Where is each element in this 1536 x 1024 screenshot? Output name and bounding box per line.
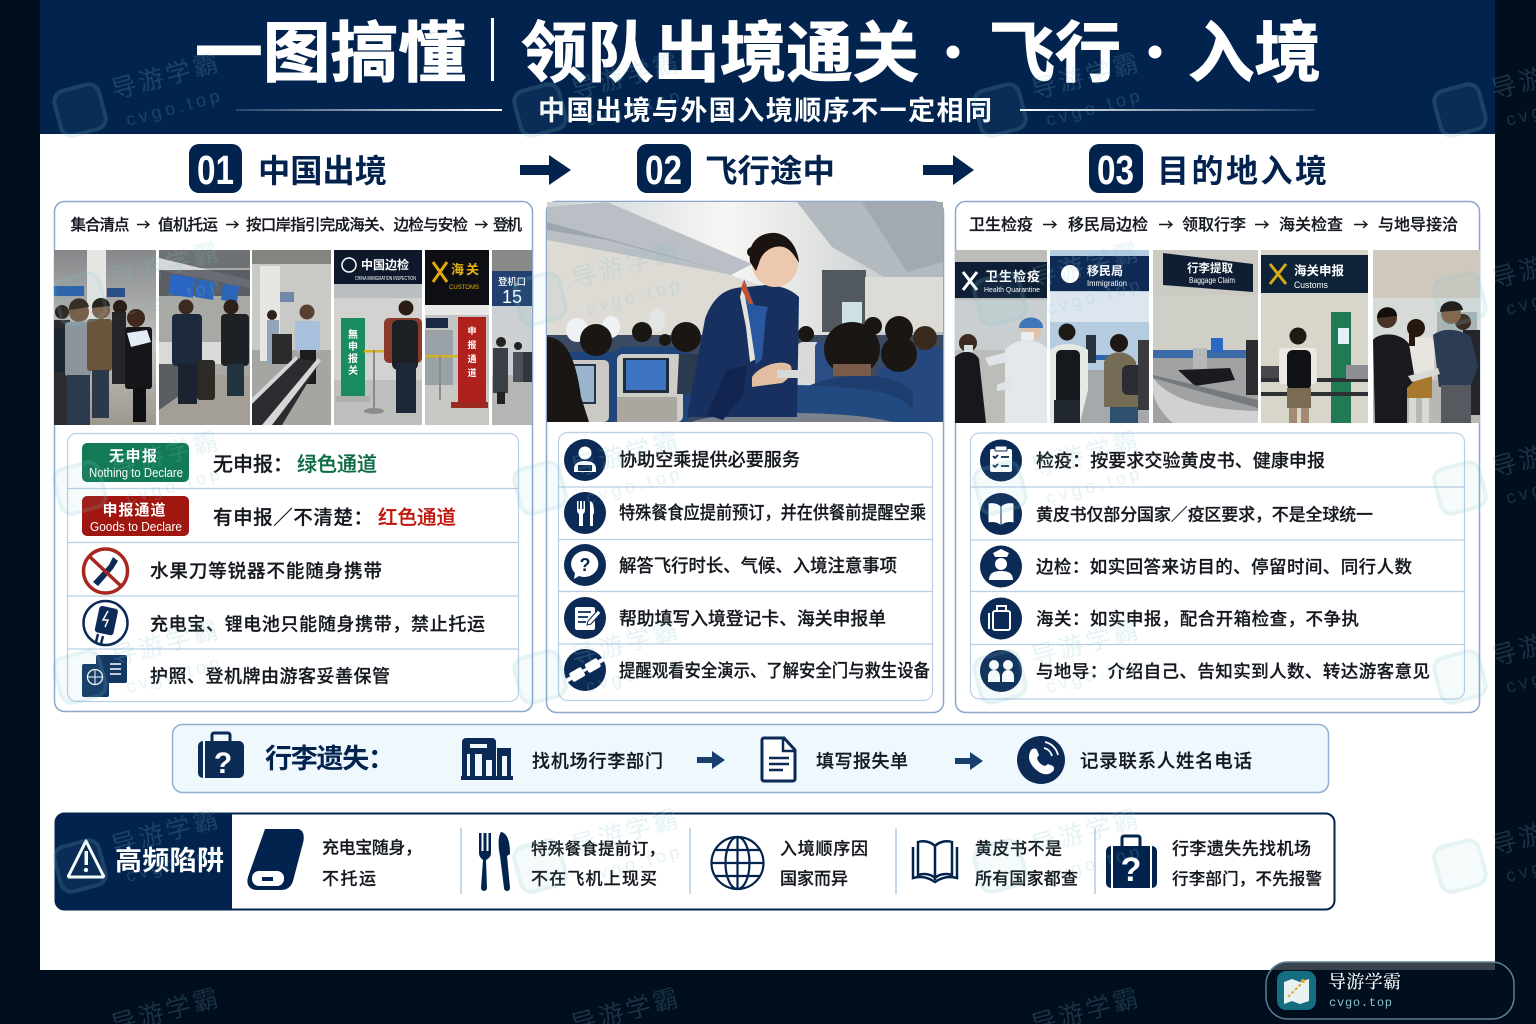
panel: China departure xyxy=(54,202,532,712)
text: 解答飞行时长、气候、入境注意事项 xyxy=(619,556,897,576)
flow text: 值机托运 xyxy=(158,216,218,234)
arrow xyxy=(923,155,974,185)
photo: immigration: Immigration xyxy=(1087,278,1127,288)
text xyxy=(531,838,665,888)
icon: suitcase xyxy=(980,598,1022,640)
icon: border officer xyxy=(980,546,1022,588)
watermark: 导游学霸 xyxy=(109,238,224,294)
photo: border control: 关 xyxy=(348,364,358,377)
arrow xyxy=(697,751,725,769)
watermark: 导游学霸 xyxy=(109,49,224,105)
watermark: cvgo.top xyxy=(124,841,225,886)
brand url: cvgo.top xyxy=(1329,996,1392,1010)
flow text: 卫生检疫 xyxy=(969,216,1033,234)
flow text: 领取行李 xyxy=(1182,216,1246,234)
watermark: 导游学霸 xyxy=(569,805,684,861)
icon: airport office xyxy=(461,738,513,780)
watermark: cvgo.top xyxy=(124,652,225,697)
photo: boarding gate: 15 xyxy=(502,287,522,307)
watermark: 导游学霸 xyxy=(1029,427,1144,483)
text: 海关：如实申报，配合开箱检查，不争执 xyxy=(1036,606,1359,631)
watermark: cvgo.top xyxy=(584,274,685,319)
icon: attendant xyxy=(564,439,606,481)
icon: lost suitcase xyxy=(1106,836,1157,889)
photo: baggage belt xyxy=(252,250,331,425)
photo: gathering xyxy=(54,250,156,425)
photo: immigration: 移民局 xyxy=(1087,263,1123,278)
text: 护照、登机牌由游客妥善保管 xyxy=(150,666,390,686)
flow text: 与地导接洽 xyxy=(1378,216,1458,234)
text: 记录联系人姓名电话 xyxy=(1080,750,1252,772)
photo: customs hall: 海关申报 xyxy=(1294,263,1344,278)
text: 边检：如实回答来访目的、停留时间、同行人数 xyxy=(1036,554,1412,579)
photo: border control: 無 xyxy=(348,328,358,341)
watermark: cvgo.top xyxy=(1044,85,1145,130)
red channel: 有申报／不清楚： xyxy=(213,501,373,530)
list: entry notes xyxy=(970,433,1465,699)
attendant xyxy=(687,233,807,420)
flow text xyxy=(70,215,522,234)
seats xyxy=(555,342,943,422)
heading: 03: 03 xyxy=(1097,147,1134,193)
green channel: 无申报： xyxy=(213,448,293,477)
photo: customs: CUSTOMS xyxy=(449,285,479,291)
text: 找机场行李部门 xyxy=(532,752,663,772)
text xyxy=(322,838,422,888)
text: 黄皮书不是 xyxy=(975,840,1062,858)
text: 不托运 xyxy=(322,870,376,888)
photo: customs: 海关 xyxy=(451,262,479,277)
red channel xyxy=(82,496,456,536)
icon: fork and knife xyxy=(479,832,510,891)
watermark: cvgo.top xyxy=(124,274,225,319)
text: 与地导：介绍自己、告知实到人数、转达游客意见 xyxy=(1036,658,1430,684)
green channel: Nothing to Declare xyxy=(89,466,183,480)
flow text: 登机 xyxy=(493,216,522,234)
text: 填写报失单 xyxy=(816,752,908,772)
text: 检疫：按要求交验黄皮书、健康申报 xyxy=(1036,447,1325,473)
photo: customs hall xyxy=(1261,250,1368,423)
green channel xyxy=(82,443,377,482)
panel: in flight xyxy=(546,202,944,712)
content sheet xyxy=(40,134,1495,970)
green channel: 绿色通道 xyxy=(297,453,377,476)
icon: globe xyxy=(712,837,764,889)
heading: 01: 01 xyxy=(197,147,234,193)
title: 飞行 xyxy=(989,16,1121,90)
icon: open book xyxy=(980,493,1022,535)
title xyxy=(195,16,1321,90)
watermark: 导游学霸 xyxy=(569,238,684,294)
watermark: cvgo.top xyxy=(1044,463,1145,508)
flow text: 移民局边检 xyxy=(1068,216,1148,234)
photo: border control: 报 xyxy=(348,352,358,365)
flow text xyxy=(969,216,1458,234)
icon: form xyxy=(564,597,606,639)
icon: document xyxy=(762,738,795,781)
watermark: cvgo.top xyxy=(584,841,685,886)
text xyxy=(780,840,868,888)
watermark: 导游学霸 xyxy=(569,427,684,483)
pitfalls label xyxy=(55,813,232,910)
brand name: 导游学霸 xyxy=(1328,968,1401,994)
photo: meeting guide xyxy=(1373,250,1480,423)
watermark: cvgo.top xyxy=(584,652,685,697)
red channel: 申报通道 xyxy=(102,501,166,519)
text xyxy=(975,840,1078,888)
watermark: cvgo.top xyxy=(1044,841,1145,886)
text: 充电宝、锂电池只能随身携带，禁止托运 xyxy=(150,614,485,634)
watermark: 导游学霸 xyxy=(1029,238,1144,294)
watermark: 导游学霸 xyxy=(569,49,684,105)
flow text: 按口岸指引完成海关、边检与安检 xyxy=(246,215,468,234)
heading: 01: 中国出境 xyxy=(258,153,387,189)
subtitle: 中国出境与外国入境顺序不一定相同 xyxy=(538,96,992,126)
icon: map logo xyxy=(1277,971,1316,1010)
photo: boarding gate: 登机口 xyxy=(498,276,526,288)
watermark: cvgo.top xyxy=(124,463,225,508)
text: 国家而异 xyxy=(780,868,848,888)
photo: customs xyxy=(425,250,489,425)
title: 领队出境通关 xyxy=(521,16,919,90)
icon: passports xyxy=(82,655,127,697)
watermark: 导游学霸 xyxy=(1029,49,1144,105)
text: 水果刀等锐器不能随身携带 xyxy=(150,560,382,582)
photo: immigration xyxy=(1050,250,1149,423)
text: 特殊餐食提前订， xyxy=(531,838,665,858)
icon: suitcase question xyxy=(198,733,244,780)
text: 入境顺序因 xyxy=(780,840,868,858)
panel: common pitfalls xyxy=(55,813,1334,910)
text xyxy=(1172,840,1322,888)
icon: suitcase question: ? xyxy=(214,747,232,780)
photo: baggage claim xyxy=(1153,250,1258,423)
title: 一图搞懂 xyxy=(195,16,466,90)
green channel: 无申报 xyxy=(109,447,157,465)
text: 所有国家都查 xyxy=(975,868,1078,888)
icon: question: ? xyxy=(580,555,590,575)
photo: customs: 道 xyxy=(467,367,477,378)
text: 充电宝随身， xyxy=(322,838,422,858)
passengers xyxy=(547,316,937,422)
watermark: 导游学霸 xyxy=(109,616,224,672)
heading: 03 xyxy=(1089,144,1327,193)
text: 不在飞机上现买 xyxy=(531,870,657,888)
watermark: cvgo.top xyxy=(584,463,685,508)
pitfalls label: 高频陷阱 xyxy=(115,846,224,876)
photo: quarantine: Health Quarantine xyxy=(984,285,1040,294)
list: in-flight duties xyxy=(558,432,932,700)
photo: border control: 中国边检 xyxy=(361,257,409,272)
photo: border control xyxy=(334,250,422,425)
icon: power bank xyxy=(84,601,128,645)
list: departure notes xyxy=(68,434,518,702)
icon: meal xyxy=(564,492,606,534)
flow text: 海关检查 xyxy=(1279,216,1343,234)
panel: lost luggage xyxy=(172,724,1328,792)
arrow xyxy=(955,752,983,770)
watermark: 导游学霸 xyxy=(109,805,224,861)
photo: baggage claim: 行李提取 xyxy=(1187,261,1234,275)
text: 帮助填写入境登记卡、海关申报单 xyxy=(619,609,886,629)
red channel: Goods to Declare xyxy=(90,520,182,534)
red channel: 红色通道 xyxy=(378,507,456,529)
watermark: cvgo.top xyxy=(1044,274,1145,319)
photo: customs: 申 xyxy=(467,325,477,336)
icon: power bank xyxy=(247,829,304,890)
watermark: 导游学霸 xyxy=(109,427,224,483)
panel: destination entry xyxy=(955,202,1480,712)
icon: phone xyxy=(1017,736,1065,784)
text: 行李部门，不先报警 xyxy=(1172,870,1322,888)
watermark: 导游学霸 xyxy=(1029,805,1144,861)
watermark: cvgo.top xyxy=(124,85,225,130)
icon: seat belt xyxy=(563,649,607,691)
heading: 行李遗失： xyxy=(265,737,395,776)
heading: 03: 目的地入境 xyxy=(1157,153,1327,189)
watermark: cvgo.top xyxy=(584,85,685,130)
photo: baggage claim: Baggage Claim xyxy=(1189,275,1235,285)
icon: book xyxy=(913,841,957,882)
text: 黄皮书仅部分国家／疫区要求，不是全球统一 xyxy=(1036,504,1373,524)
icon: clipboard xyxy=(980,440,1022,482)
photo: check-in counter xyxy=(159,250,250,425)
photo: customs: 报 xyxy=(467,339,477,350)
heading: 02 xyxy=(637,144,835,193)
heading: 02: 02 xyxy=(645,147,682,193)
flow text: 集合清点 xyxy=(70,216,130,234)
watermark: 导游学霸 xyxy=(569,616,684,672)
icon: question xyxy=(564,544,606,586)
photo: flight attendant in cabin xyxy=(547,202,943,422)
heading: 02: 飞行途中 xyxy=(705,153,835,189)
icon: group xyxy=(980,650,1022,692)
photo: customs hall: Customs xyxy=(1294,280,1328,290)
brand badge xyxy=(1266,962,1514,1019)
photo: quarantine xyxy=(955,250,1047,423)
photo: customs: 通 xyxy=(467,354,477,364)
text: 提醒观看安全演示、了解安全门与救生设备 xyxy=(619,660,930,681)
title: 入境 xyxy=(1188,16,1321,90)
header band xyxy=(40,0,1495,134)
icon: lost suitcase: ? xyxy=(1121,851,1141,889)
watermark: 导游学霸 xyxy=(1029,616,1144,672)
photo: quarantine: 卫生检疫 xyxy=(985,269,1040,284)
watermark: cvgo.top xyxy=(1044,652,1145,697)
photo: border control: 申 xyxy=(348,340,358,353)
icon: warning xyxy=(68,841,104,877)
text: 特殊餐食应提前预订，并在供餐前提醒空乘 xyxy=(619,502,926,523)
arrow xyxy=(520,155,571,185)
icon: no knife xyxy=(84,549,128,593)
photo: boarding gate xyxy=(492,250,532,425)
heading: 01 xyxy=(189,144,387,193)
text: 协助空乘提供必要服务 xyxy=(619,450,800,470)
text: 行李遗失先找机场 xyxy=(1172,840,1311,858)
